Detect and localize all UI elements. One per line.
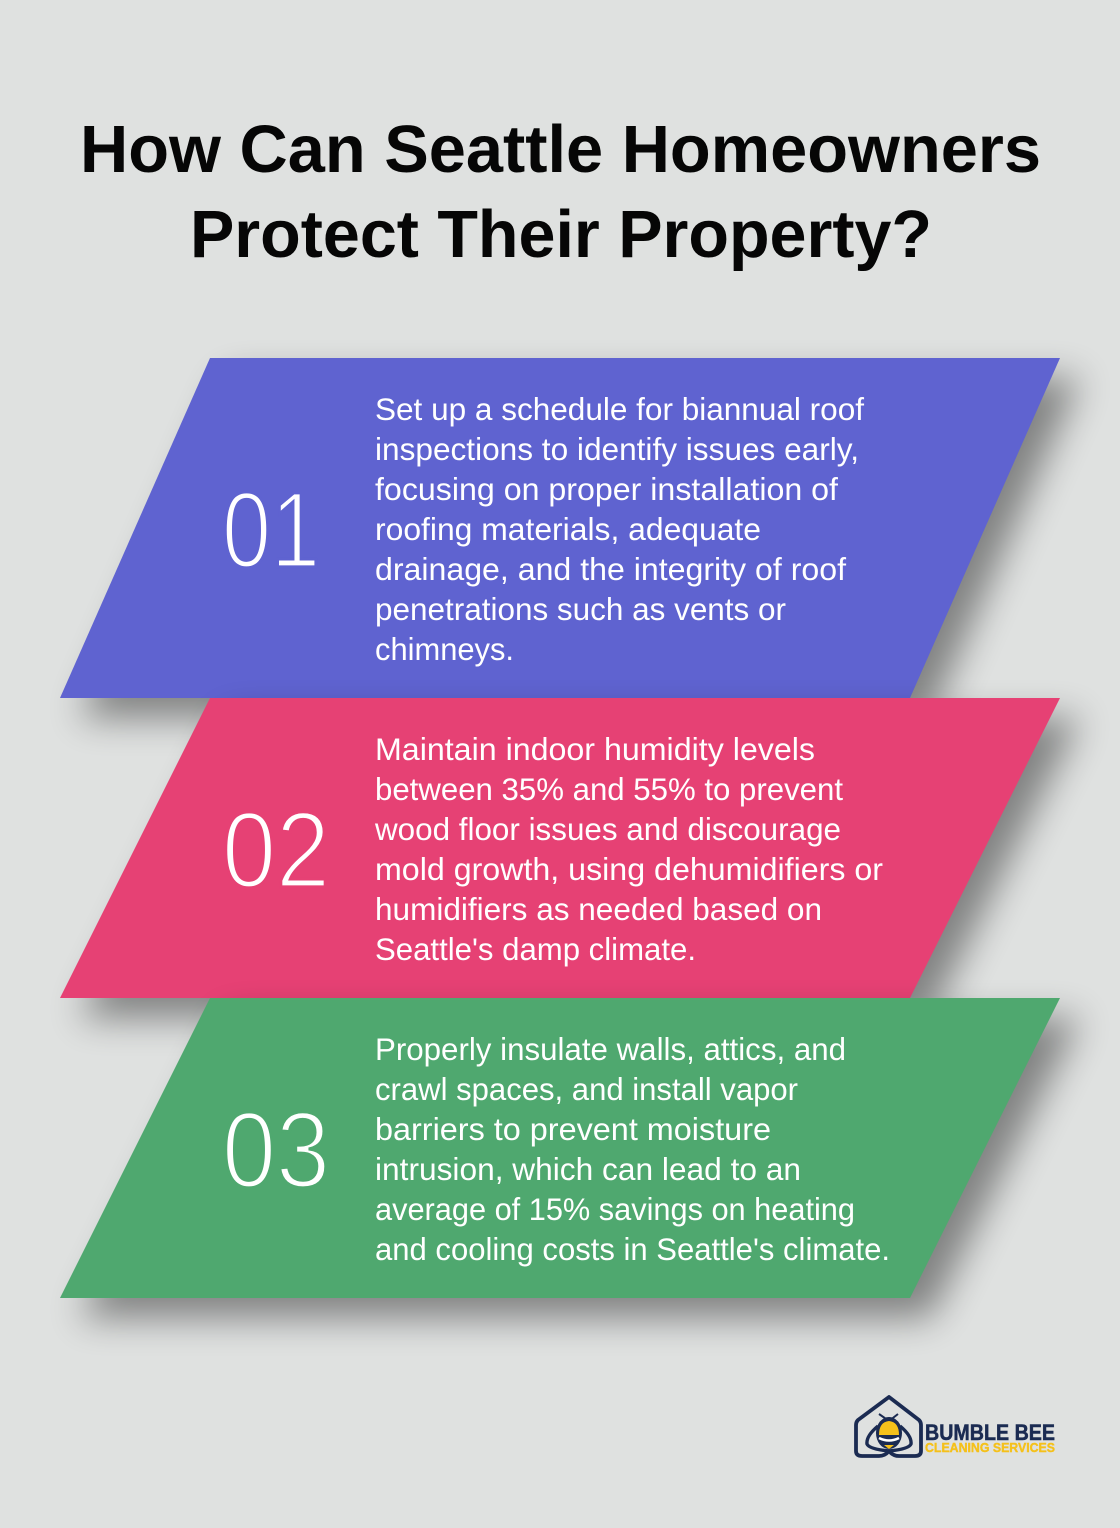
logo wordmark: BUMBLE BEE bbox=[925, 1420, 1055, 1445]
text: step 01: roofing materials, adequate bbox=[375, 511, 761, 547]
text: step 02: mold growth, using dehumidifiers or bbox=[375, 851, 883, 887]
text: step 02: between 35% and 55% to prevent bbox=[375, 771, 843, 807]
text: step 03: crawl spaces, and install vapor bbox=[375, 1071, 798, 1107]
text: step 02: humidifiers as needed based on bbox=[375, 891, 822, 927]
panel: step 03 bbox=[60, 998, 1080, 1318]
number 02: 02 bbox=[222, 789, 330, 910]
number 01: 01 bbox=[222, 469, 320, 590]
text: step 02: Maintain indoor humidity levels bbox=[375, 731, 815, 767]
text: step 01: penetrations such as vents or bbox=[375, 591, 786, 627]
title: How Can Seattle Homeowners bbox=[80, 112, 1041, 187]
text: step 03: and cooling costs in Seattle's climate. bbox=[375, 1231, 890, 1267]
title: Protect Their Property? bbox=[190, 197, 932, 272]
panel: step 01 bbox=[60, 358, 1080, 718]
text: step 01 bbox=[375, 391, 864, 667]
text: step 01: focusing on proper installation of bbox=[375, 471, 838, 507]
text: step 03: average of 15% savings on heating bbox=[375, 1191, 855, 1227]
text: step 02: Seattle's damp climate. bbox=[375, 931, 696, 967]
logo: Bumble Bee Cleaning Services bbox=[856, 1397, 1055, 1456]
title bbox=[80, 112, 1041, 272]
text: step 02: wood floor issues and discourage bbox=[374, 811, 841, 847]
logo tagline: CLEANING SERVICES bbox=[925, 1440, 1055, 1455]
text: step 02 bbox=[374, 731, 883, 967]
panel: step 02 bbox=[60, 698, 1080, 1018]
text: step 01: chimneys. bbox=[375, 631, 514, 667]
text: step 03: Properly insulate walls, attics, and bbox=[375, 1031, 846, 1067]
text: step 01: Set up a schedule for biannual roof bbox=[375, 391, 864, 427]
number 03: 03 bbox=[222, 1089, 330, 1210]
text: step 03 bbox=[375, 1031, 890, 1267]
text: step 01: drainage, and the integrity of roof bbox=[375, 551, 846, 587]
text: step 03: intrusion, which can lead to an bbox=[375, 1151, 801, 1187]
icon: house with bee bbox=[856, 1397, 921, 1456]
text: step 03: barriers to prevent moisture bbox=[375, 1111, 771, 1147]
text: step 01: inspections to identify issues early, bbox=[375, 431, 859, 467]
